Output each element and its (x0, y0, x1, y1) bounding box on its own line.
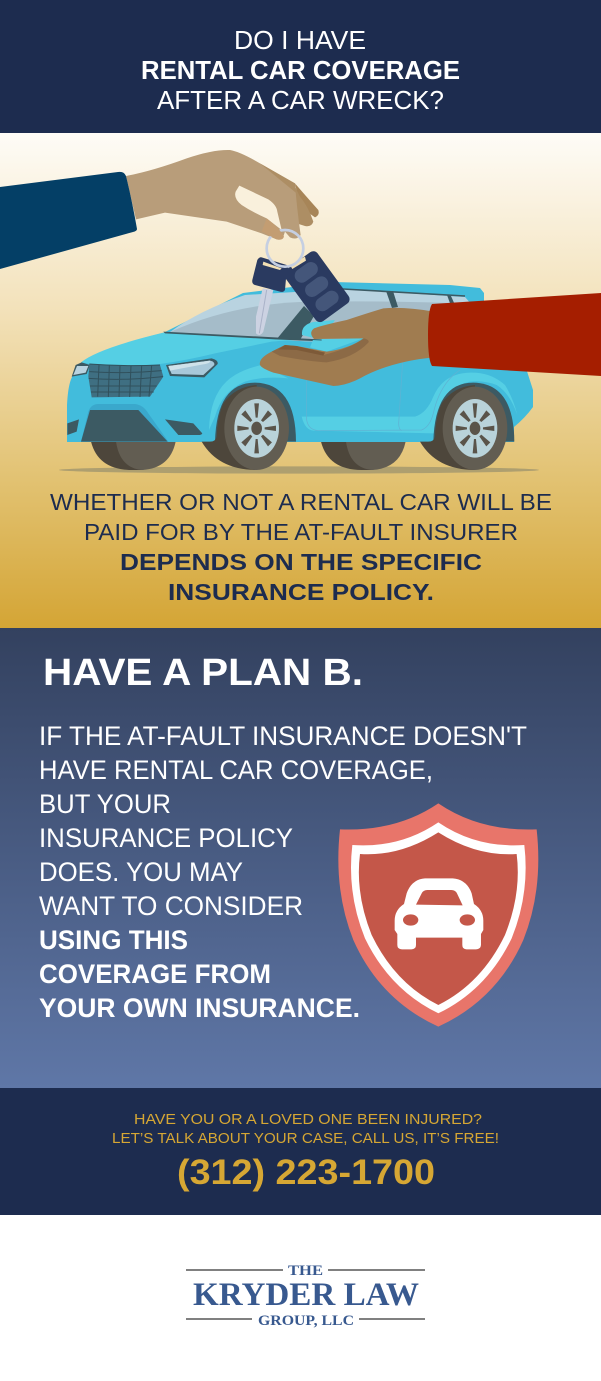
body text: WANT TO CONSIDER (39, 891, 303, 921)
fender highlight (209, 365, 288, 430)
title panel (0, 0, 601, 133)
front wheel (202, 383, 296, 470)
panel: have a plan B (0, 628, 601, 1088)
body text: IF THE AT-FAULT INSURANCE DOESN'T (39, 721, 527, 751)
call to action text: LET’S TALK ABOUT YOUR CASE, CALL US, IT’S FREE! (112, 1130, 499, 1147)
title: AFTER A CAR WRECK? (157, 87, 444, 115)
icon: shield with car (338, 803, 538, 1027)
windows (170, 289, 485, 342)
rear wheel (420, 383, 514, 470)
policy note text: PAID FOR BY THE AT-FAULT INSURER (84, 519, 518, 545)
front car details (67, 332, 322, 470)
key ring (267, 230, 303, 267)
car body (67, 282, 533, 442)
blue sleeve (0, 172, 137, 269)
hood (81, 333, 322, 365)
policy note text: INSURANCE POLICY. (168, 579, 434, 605)
body text: USING THIS (39, 925, 188, 955)
body text: YOUR OWN INSURANCE. (39, 993, 360, 1023)
grille (88, 364, 163, 397)
panel: car illustration and policy note (0, 133, 601, 628)
panel: call to action (0, 1088, 601, 1215)
receiving hand (260, 308, 433, 386)
key head (252, 257, 288, 292)
logo (186, 1263, 425, 1329)
gap between finger and thumb (235, 186, 282, 230)
logo: GROUP, LLC (258, 1313, 354, 1329)
illustration: keys handed over car (0, 150, 601, 474)
red sleeve (428, 293, 601, 376)
ground shadow (59, 466, 539, 474)
sill highlight (302, 373, 517, 433)
body text: HAVE RENTAL CAR COVERAGE, (39, 755, 433, 785)
fingers behind (295, 183, 319, 217)
logo: THE (288, 1263, 323, 1279)
heading: HAVE A PLAN B. (43, 652, 363, 694)
call to action text: HAVE YOU OR A LOVED ONE BEEN INJURED? (134, 1111, 482, 1128)
title: RENTAL CAR COVERAGE (141, 57, 460, 85)
thumb tip (262, 218, 284, 240)
phone number: (312) 223-1700 (177, 1153, 435, 1192)
body text: INSURANCE POLICY (39, 823, 293, 853)
rear car details (302, 362, 517, 470)
lower intake (81, 404, 168, 442)
key fob (282, 249, 352, 324)
headlights (166, 358, 218, 377)
far wheels (91, 442, 406, 470)
policy note text: DEPENDS ON THE SPECIFIC (120, 549, 482, 575)
policy note text: WHETHER OR NOT A RENTAL CAR WILL BE (50, 489, 552, 515)
hand (126, 150, 301, 239)
title: DO I HAVE (234, 27, 366, 55)
body text: DOES. YOU MAY (39, 857, 243, 887)
logo: KRYDER LAW (193, 1277, 419, 1313)
key blade (256, 288, 273, 335)
body text: BUT YOUR (39, 789, 171, 819)
body text: COVERAGE FROM (39, 959, 271, 989)
title (141, 27, 460, 115)
body text (39, 721, 527, 1023)
policy note text (50, 489, 552, 605)
call to action text (112, 1111, 499, 1147)
giving hand with keys (126, 150, 352, 335)
